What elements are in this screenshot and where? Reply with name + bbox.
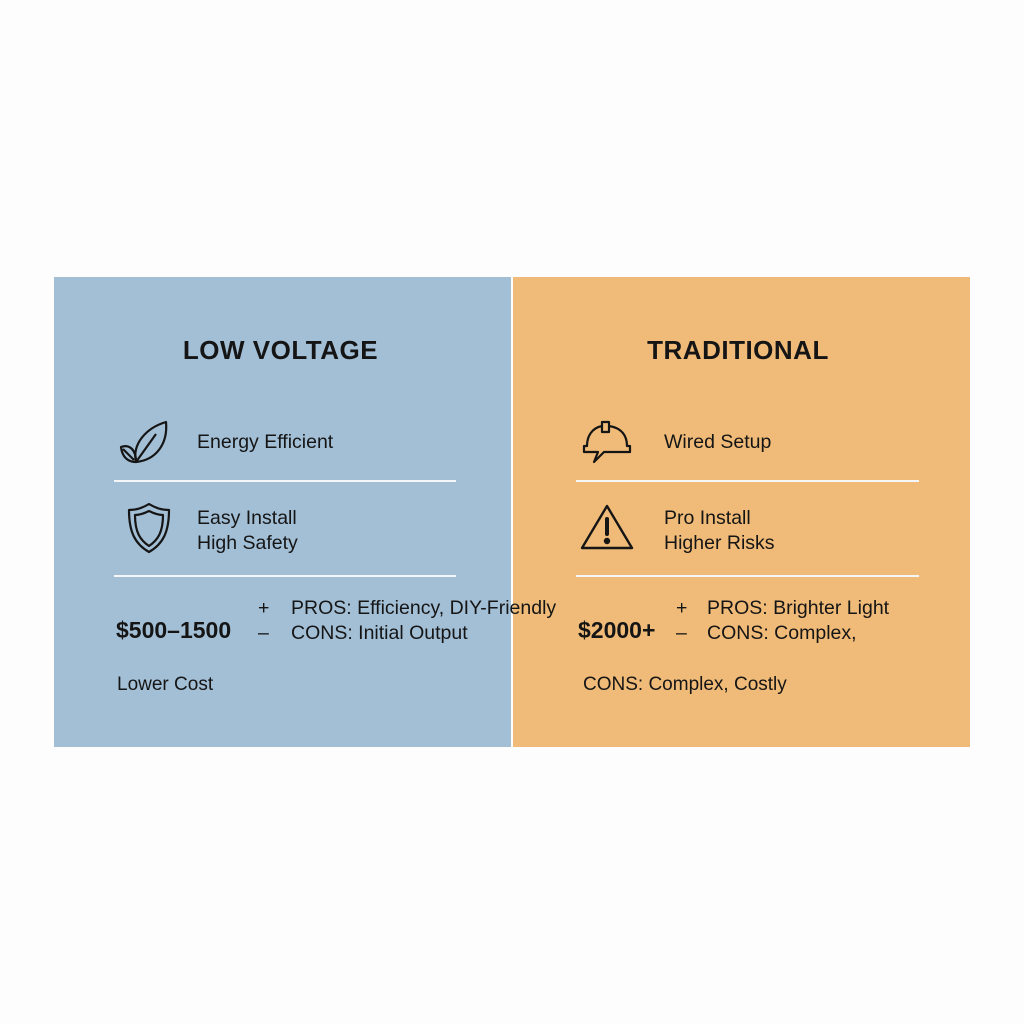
panel: traditional: [513, 277, 970, 747]
pros/cons: traditional: +: [676, 597, 687, 619]
pros/cons: low voltage: PROS: Efficiency, DIY-Friendly: [291, 597, 556, 619]
pros/cons: low voltage: +: [258, 597, 269, 619]
pros/cons: traditional: CONS: Complex,: [707, 622, 857, 644]
pros/cons: low voltage: CONS: Initial Output: [291, 622, 468, 644]
panel: low voltage: [54, 277, 511, 747]
heading: low voltage: LOW VOLTAGE: [183, 335, 378, 365]
pros/cons: traditional: –: [676, 622, 687, 644]
pros/cons: low voltage: [258, 597, 556, 644]
text: pro install: [664, 507, 775, 554]
heading: traditional: TRADITIONAL: [647, 335, 829, 365]
text: wired setup: Wired Setup: [664, 431, 771, 453]
price: low voltage: $500–1500: [116, 617, 231, 643]
text: cons costly: CONS: Complex, Costly: [583, 674, 787, 695]
pros/cons: traditional: [676, 597, 889, 644]
icon: warning: [580, 504, 634, 550]
text: easy install: High Safety: [197, 532, 298, 554]
price: traditional: $2000+: [578, 617, 655, 643]
icon: hard hat lightning: [582, 420, 632, 464]
text: easy install: [197, 507, 298, 554]
pros/cons: low voltage: –: [258, 622, 269, 644]
text: pro install: Higher Risks: [664, 532, 775, 554]
icon: leaf: [120, 420, 168, 464]
text: pro install: Pro Install: [664, 507, 751, 529]
text: energy efficient: Energy Efficient: [197, 431, 333, 453]
icon: shield: [128, 502, 170, 554]
text: lower cost: Lower Cost: [117, 674, 213, 695]
text: easy install: Easy Install: [197, 507, 297, 529]
pros/cons: traditional: PROS: Brighter Light: [707, 597, 889, 619]
